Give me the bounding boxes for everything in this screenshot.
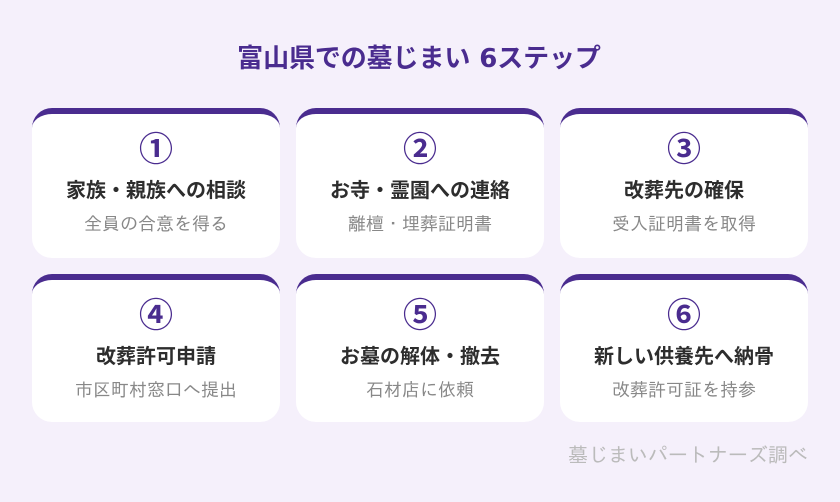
description 5: 石材店に依頼 <box>366 380 474 400</box>
panel: step 5 <box>296 274 544 422</box>
number 6: ⑥ <box>667 297 701 335</box>
title: 富山県での墓じまい 6ステップ <box>237 44 601 74</box>
description 2: 離檀・埋葬証明書 <box>348 214 492 234</box>
number 5: ⑤ <box>403 297 437 335</box>
source note: 墓じまいパートナーズ調べ <box>568 445 808 467</box>
panel: step 4 <box>32 274 280 422</box>
number 2: ② <box>403 131 437 169</box>
description 4: 市区町村窓口へ提出 <box>75 380 237 400</box>
heading 1: 家族・親族への相談 <box>66 180 246 202</box>
heading 5: お墓の解体・撤去 <box>340 346 500 368</box>
description 6: 改葬許可証を持参 <box>612 380 756 400</box>
heading 3: 改葬先の確保 <box>624 180 744 202</box>
panel: step 1 <box>32 108 280 258</box>
heading 2: お寺・霊園への連絡 <box>330 180 510 202</box>
number 4: ④ <box>139 297 173 335</box>
description 3: 受入証明書を取得 <box>612 214 756 234</box>
number 1: ① <box>139 131 173 169</box>
number 3: ③ <box>667 131 701 169</box>
panel: step 3 <box>560 108 808 258</box>
panel: step 2 <box>296 108 544 258</box>
heading 6: 新しい供養先へ納骨 <box>594 346 774 368</box>
description 1: 全員の合意を得る <box>84 214 228 234</box>
panel: step 6 <box>560 274 808 422</box>
heading 4: 改葬許可申請 <box>96 346 216 368</box>
